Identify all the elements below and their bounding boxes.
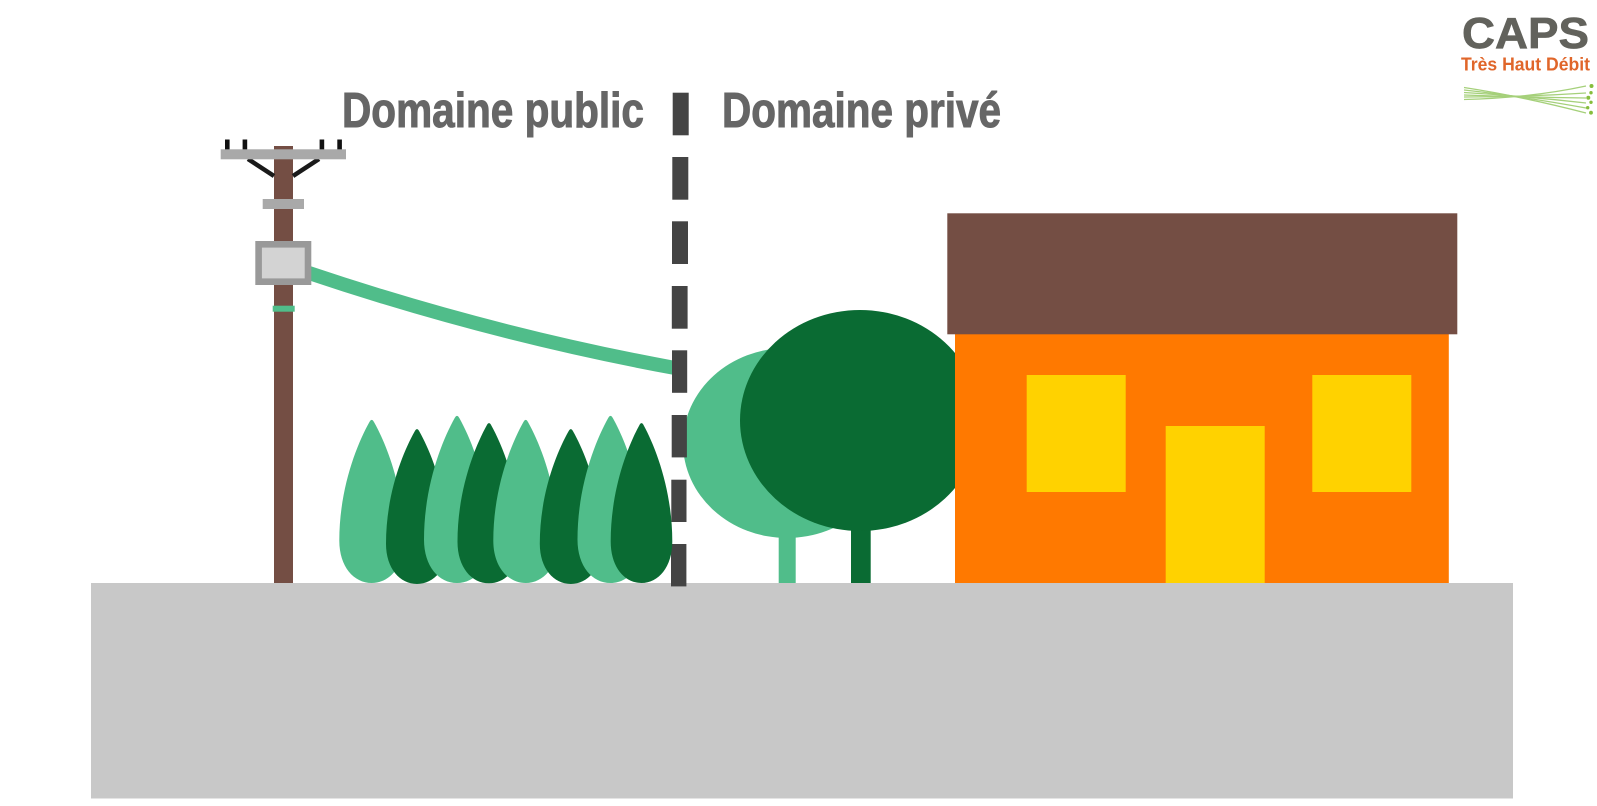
ground <box>91 583 1513 798</box>
utility pole <box>221 140 346 584</box>
cypress 5 <box>493 420 558 583</box>
right window <box>1312 375 1411 492</box>
dark tree crown <box>740 310 980 531</box>
door <box>1166 426 1265 583</box>
heading: domaine privé: Domaine privé <box>722 84 1001 138</box>
light tree trunk <box>779 530 796 583</box>
logo fibre dots <box>1586 84 1594 115</box>
lower crossarm <box>263 199 304 209</box>
light green round tree <box>683 348 891 583</box>
hedge of cypress trees <box>339 416 672 584</box>
cypress 7 <box>578 416 644 583</box>
cypress 1 <box>339 420 404 583</box>
roof <box>947 213 1457 334</box>
dark green round tree <box>740 310 980 583</box>
dark tree trunk <box>851 525 871 583</box>
fibre cable <box>306 272 675 368</box>
logo fibre lines <box>1464 86 1586 113</box>
junction box <box>259 244 308 282</box>
cypress 2 <box>386 429 448 584</box>
logo tagline: Très Haut Débit <box>1461 54 1590 74</box>
house wall <box>955 334 1449 583</box>
green clamp <box>273 306 295 312</box>
light tree crown <box>683 348 891 538</box>
heading: domaine public: Domaine public <box>342 84 644 138</box>
house <box>947 213 1457 583</box>
logo wordmark: CAPS <box>1462 9 1589 58</box>
cypress 6 <box>540 429 602 584</box>
cypress 4 <box>458 423 520 583</box>
pole shaft <box>274 146 293 584</box>
upper crossarm <box>221 149 346 159</box>
left window <box>1027 375 1126 492</box>
logo: CAPS Très Haut Débit <box>1461 9 1594 115</box>
insulators <box>225 140 342 150</box>
cypress 8 <box>611 423 672 583</box>
braces <box>248 159 319 176</box>
dashed boundary line <box>671 93 689 586</box>
cypress 3 <box>424 416 490 583</box>
